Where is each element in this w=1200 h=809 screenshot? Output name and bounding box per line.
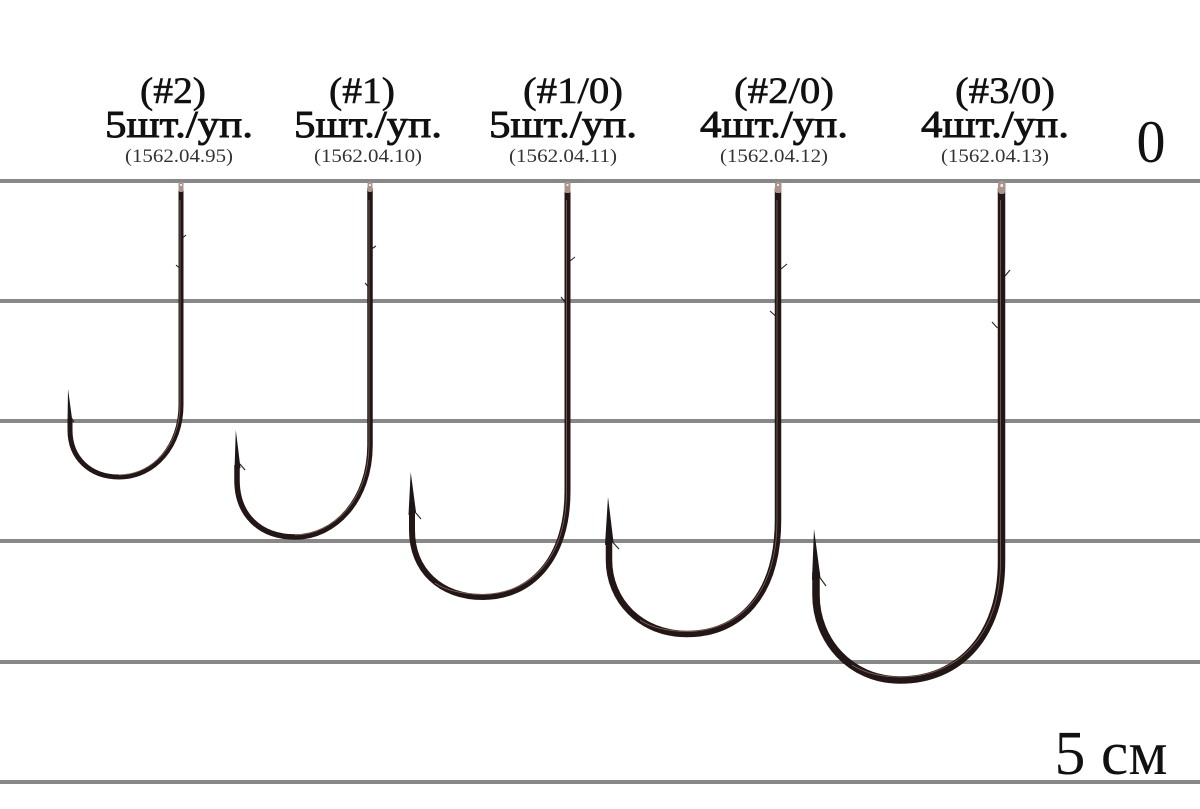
label: size #2: (1562.04.95) xyxy=(125,146,233,167)
label: size #1: (1562.04.10) xyxy=(314,146,422,167)
hook: size #2 xyxy=(68,182,186,477)
hook: size #1/0 xyxy=(408,182,575,597)
label: size #1/0: 5шт./уп. xyxy=(489,104,637,146)
scale label: 5 cm: 5 см xyxy=(1054,720,1168,788)
label: size #3/0: (1562.04.13) xyxy=(941,146,1049,167)
label: size #2: (#2) xyxy=(140,71,206,112)
label: size #2/0: 4шт./уп. xyxy=(700,104,848,146)
label: size #3/0: 4шт./уп. xyxy=(921,104,1069,146)
label: size #1/0: (#1/0) xyxy=(523,71,623,112)
label: size #2/0: (1562.04.12) xyxy=(720,146,828,167)
label: size #1 xyxy=(294,71,442,167)
label: size #1/0 xyxy=(489,71,637,167)
hook: size #3/0 xyxy=(812,181,1010,680)
label: size #3/0 xyxy=(921,71,1069,167)
hook: size #1 xyxy=(234,182,376,537)
label: size #2/0 xyxy=(700,71,848,167)
label: size #1: (#1) xyxy=(329,71,395,112)
scale label: 0: 0 xyxy=(1136,109,1166,175)
label: size #2: 5шт./уп. xyxy=(105,104,253,146)
label: size #2/0: (#2/0) xyxy=(734,71,834,112)
label: size #1: 5шт./уп. xyxy=(294,104,442,146)
label: size #1/0: (1562.04.11) xyxy=(509,146,617,167)
label: size #3/0: (#3/0) xyxy=(955,71,1055,112)
hook: size #2/0 xyxy=(605,182,787,634)
label: size #2 xyxy=(105,71,253,167)
